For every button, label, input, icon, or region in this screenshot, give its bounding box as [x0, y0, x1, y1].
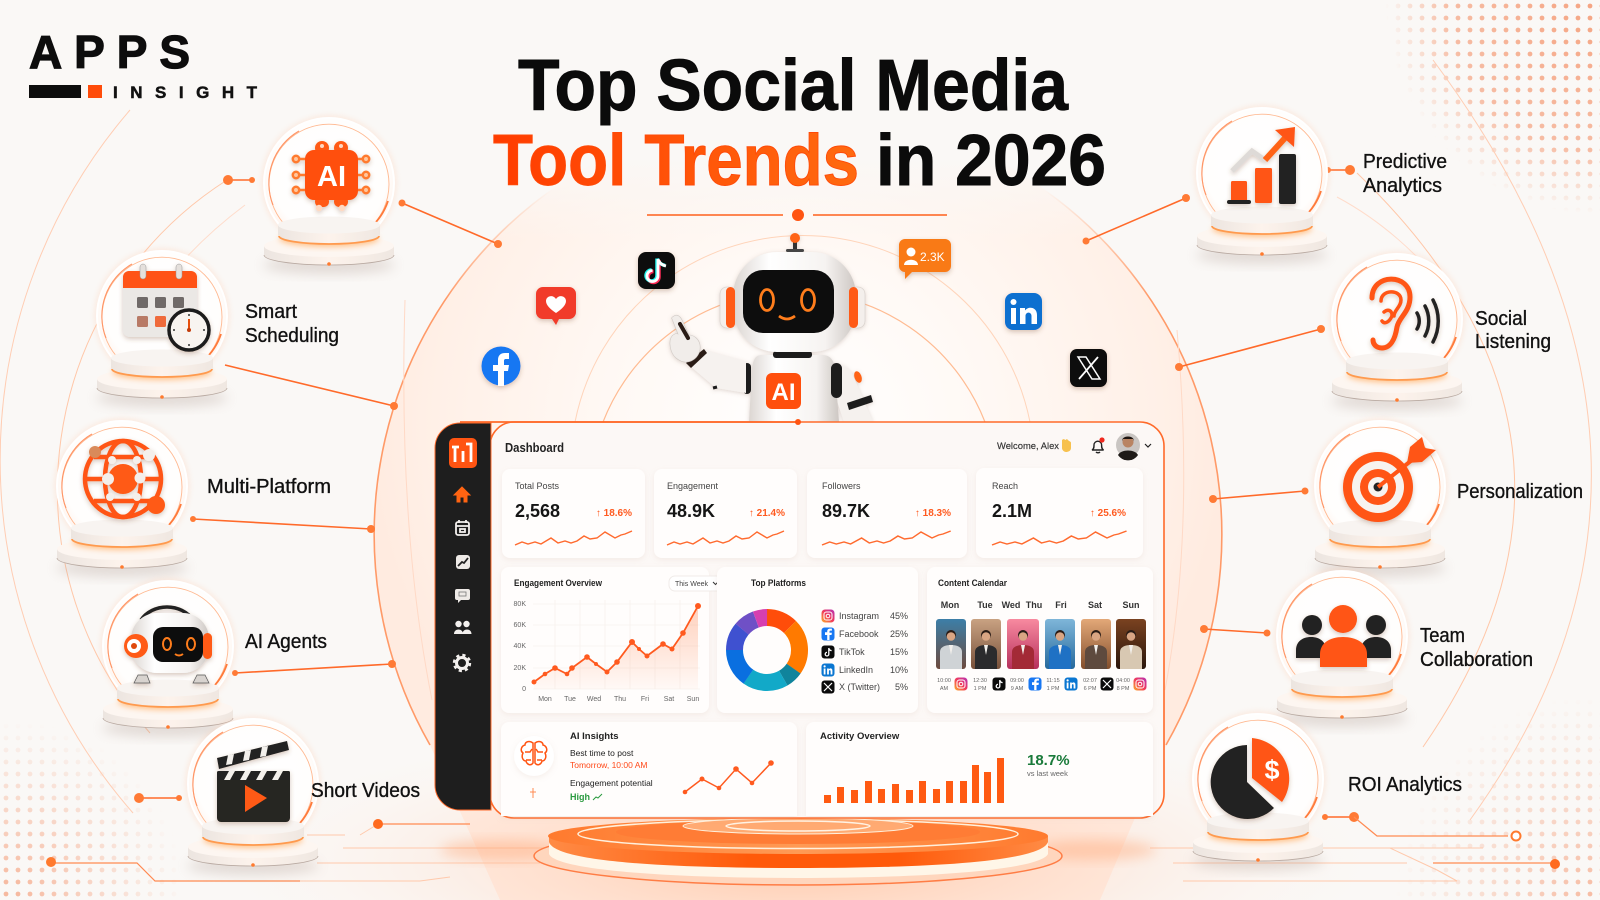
schedule row: 6 PM: [1084, 686, 1097, 692]
weekdays: Thu: [1026, 600, 1042, 610]
title: Top Social Media: [518, 46, 1069, 126]
line chart: Fri: [641, 696, 650, 703]
weekdays: Sun: [1122, 600, 1140, 610]
line chart: Wed: [587, 696, 601, 703]
donut chart: [721, 604, 813, 696]
dropdown: This Week: [675, 581, 708, 588]
panel: Top Platforms: Top Platforms: [751, 578, 806, 589]
stat card: Total Posts: ↑ 18.6%: [596, 508, 632, 519]
icon: AI chip: [293, 141, 369, 211]
dashboard frame: [490, 422, 1164, 818]
line chart: 20K: [514, 665, 526, 672]
panel: Activity Overview: 18.7%: [1027, 752, 1070, 769]
stat card: Reach: ↑ 25.6%: [1090, 508, 1126, 519]
feature: Short Videos: [187, 719, 420, 875]
robot right arm: [834, 364, 873, 422]
line chart: 0: [522, 686, 526, 693]
platform legend: LinkedIn: [839, 665, 873, 675]
label: Predictive Analytics: Predictive: [1363, 151, 1447, 173]
schedule row: 9 AM: [1011, 686, 1024, 692]
panel: Top Platforms: [717, 567, 918, 713]
content thumbnails: [936, 619, 1146, 669]
platform legend: [822, 610, 908, 694]
feature: Smart Scheduling: [96, 251, 339, 407]
schedule row: 02:07: [1083, 678, 1097, 684]
label: Predictive Analytics: [1363, 151, 1447, 197]
platform legend: X (Twitter): [839, 682, 880, 692]
panel: Engagement Overview: [501, 567, 724, 713]
stat card: Total Posts: [502, 469, 645, 558]
icon: calendar with clock: [123, 264, 209, 350]
dashboard: [435, 419, 1164, 818]
robot ears: [720, 287, 865, 328]
label: Team Collaboration: Team: [1420, 625, 1465, 647]
stat card: Followers: Followers: [822, 481, 861, 491]
stat card: Followers: [807, 469, 967, 558]
schedule row: 1 PM: [1047, 686, 1060, 692]
stat card: Followers: ↑ 18.3%: [915, 508, 951, 519]
title: [493, 46, 1106, 201]
icon: ear with sound waves: [1372, 279, 1438, 348]
panel: Activity Overview: vs last week: [1027, 769, 1068, 778]
logo: APPS: [29, 26, 190, 78]
panel: AI Insights: Tomorrow, 10:00 AM: [570, 760, 647, 770]
sidebar icon: settings: [454, 655, 470, 671]
feature: ROI Analytics: [1192, 714, 1462, 870]
icon: followers bubble: 2.3K: [920, 250, 945, 264]
robot head: [733, 252, 856, 352]
central arc glow: [374, 110, 1222, 900]
decorative dot pattern: bottom right: [1420, 714, 1600, 896]
platform legend: 5%: [895, 682, 908, 692]
line chart: 80K: [514, 601, 526, 608]
platform legend: 25%: [890, 629, 908, 639]
mini trend line: [683, 760, 774, 794]
schedule row: [937, 678, 1146, 692]
label: ROI Analytics: ROI Analytics: [1348, 774, 1462, 796]
feature: Personalization: [1314, 421, 1583, 577]
dropdown: [669, 576, 724, 591]
robot body: [743, 351, 842, 422]
platform legend: 15%: [890, 647, 908, 657]
line chart: Sat: [664, 696, 674, 703]
panel: AI Insights: Engagement potential: [570, 778, 653, 788]
weekdays: Fri: [1055, 600, 1067, 610]
icon: TikTok: [638, 252, 675, 289]
sidebar: [449, 438, 477, 671]
stat card: Total Posts: Total Posts: [515, 481, 560, 491]
stat card: Reach: [976, 468, 1143, 558]
stat card: Engagement: Engagement: [667, 481, 719, 491]
feature: Multi-Platform: [56, 421, 331, 577]
robot antenna: [786, 233, 804, 252]
sidebar icon: analytics: [456, 555, 470, 569]
sidebar icon: chat: [455, 589, 470, 603]
pedestal: [440, 818, 1156, 885]
feature: AI Agents: [102, 581, 327, 737]
panel: Content Calendar: Content Calendar: [938, 578, 1007, 589]
label: Multi-Platform: Multi-Platform: [207, 476, 331, 498]
logo: INSIGHT: [113, 83, 258, 102]
platform legend: 10%: [890, 665, 908, 675]
line chart: 60K: [514, 622, 526, 629]
panel: AI Insights: [501, 722, 797, 816]
circuit traces: pale: [155, 824, 1483, 881]
label: Predictive Analytics: Analytics: [1363, 175, 1442, 197]
soft fade behind title: [330, 100, 1270, 240]
label: Social Listening: Social: [1475, 308, 1527, 330]
panel: Content Calendar: [927, 567, 1153, 713]
welcome and user menu: [997, 433, 1151, 460]
robot body: AI: [772, 379, 796, 406]
icon: followers bubble: [899, 239, 951, 279]
weekdays: Tue: [977, 600, 993, 610]
sidebar icon: users: [454, 621, 472, 634]
icon: pie chart with dollar: $: [1264, 755, 1280, 785]
icon: brain: [514, 736, 554, 776]
platform legend: 45%: [890, 611, 908, 621]
panel: Engagement Overview: Engagement Overview: [514, 578, 603, 589]
label: AI Agents: AI Agents: [245, 631, 327, 653]
circuit traces: bright: [46, 817, 1560, 881]
stat card: Engagement: [654, 469, 797, 558]
weekdays: [941, 600, 1140, 610]
icon: team people: [1296, 605, 1391, 667]
stat card: Reach: 2.1M: [992, 501, 1032, 521]
label: Smart Scheduling: Smart: [245, 301, 297, 323]
icon: Facebook: [482, 346, 520, 386]
logo: [29, 26, 258, 102]
line chart: 40K: [514, 643, 526, 650]
stat card: Engagement: ↑ 21.4%: [749, 508, 785, 519]
panel: AI Insights: High: [570, 792, 590, 802]
panel: Activity Overview: Activity Overview: [820, 731, 900, 742]
stat card: Total Posts: 2,568: [515, 501, 560, 521]
decorative dot pattern: top right: [1396, 4, 1600, 208]
icon: target with dart: [1343, 437, 1436, 522]
weekdays: Mon: [941, 600, 959, 610]
decorative dot pattern: bottom left: [4, 736, 164, 896]
sidebar icon: home: [454, 487, 470, 502]
stat card: Reach: Reach: [992, 481, 1018, 491]
label: Social Listening: [1475, 308, 1551, 353]
panel: Activity Overview: [806, 722, 1153, 816]
label: Smart Scheduling: [245, 301, 339, 347]
schedule row: 11:15: [1046, 678, 1060, 684]
panel: AI Insights: AI Insights: [570, 731, 619, 742]
line chart: Sun: [687, 696, 699, 703]
icon: pie chart with dollar: [1211, 738, 1289, 819]
sidebar icon: calendar: [456, 520, 469, 535]
schedule row: 10:00: [937, 678, 951, 684]
schedule row: AM: [940, 686, 949, 692]
feature: Team Collaboration: [1276, 571, 1533, 727]
welcome and user menu: Welcome, Alex: [997, 441, 1059, 452]
icon: heart bubble: [536, 287, 576, 325]
icon: clapperboard: [217, 741, 290, 822]
icon: network globe: [85, 441, 165, 517]
icon: AI chip: AI: [317, 161, 346, 193]
weekdays: Wed: [1002, 600, 1020, 610]
sidebar logo: [449, 438, 477, 468]
weekdays: Sat: [1088, 600, 1102, 610]
dashboard heading: Dashboard: [505, 441, 564, 455]
schedule row: 04:00: [1116, 678, 1130, 684]
label: Short Videos: Short Videos: [311, 780, 420, 802]
schedule row: 8 PM: [1117, 686, 1130, 692]
icon: agent robot: [124, 607, 212, 683]
icon: growth chart: [1227, 127, 1296, 204]
robot arm and pointing hand: [670, 315, 746, 393]
schedule row: 09:00: [1010, 678, 1024, 684]
platform legend: TikTok: [839, 647, 865, 657]
label: Team Collaboration: [1420, 625, 1533, 671]
floor glow: [0, 740, 1600, 900]
stat card: Followers: 89.7K: [822, 501, 870, 521]
label: Social Listening: Listening: [1475, 331, 1551, 353]
schedule row: 1 PM: [974, 686, 987, 692]
icon: LinkedIn: [1005, 293, 1042, 330]
label: Personalization: Personalization: [1457, 481, 1583, 503]
schedule row: 12:30: [973, 678, 987, 684]
feature: Social Listening: [1331, 254, 1551, 410]
line chart: [514, 600, 701, 703]
title: in 2026: [876, 121, 1106, 201]
label: Team Collaboration: Collaboration: [1420, 649, 1533, 671]
line chart: Thu: [614, 696, 626, 703]
label: Smart Scheduling: Scheduling: [245, 325, 339, 347]
robot mascot: [670, 233, 873, 422]
platform legend: Instagram: [839, 611, 879, 621]
title divider: [647, 209, 947, 221]
title: Tool Trends: [493, 121, 859, 201]
icon: X: [1070, 349, 1107, 387]
panel: AI Insights: Best time to post: [570, 748, 634, 758]
platform legend: Facebook: [839, 629, 879, 639]
activity bar chart: [824, 758, 1004, 803]
line chart: Mon: [538, 696, 552, 703]
connector lines: [134, 165, 1359, 822]
feature: AI chip: [263, 118, 395, 274]
stat card: Engagement: 48.9K: [667, 501, 715, 521]
line chart: Tue: [564, 696, 576, 703]
feature: Predictive Analytics: [1196, 108, 1447, 264]
